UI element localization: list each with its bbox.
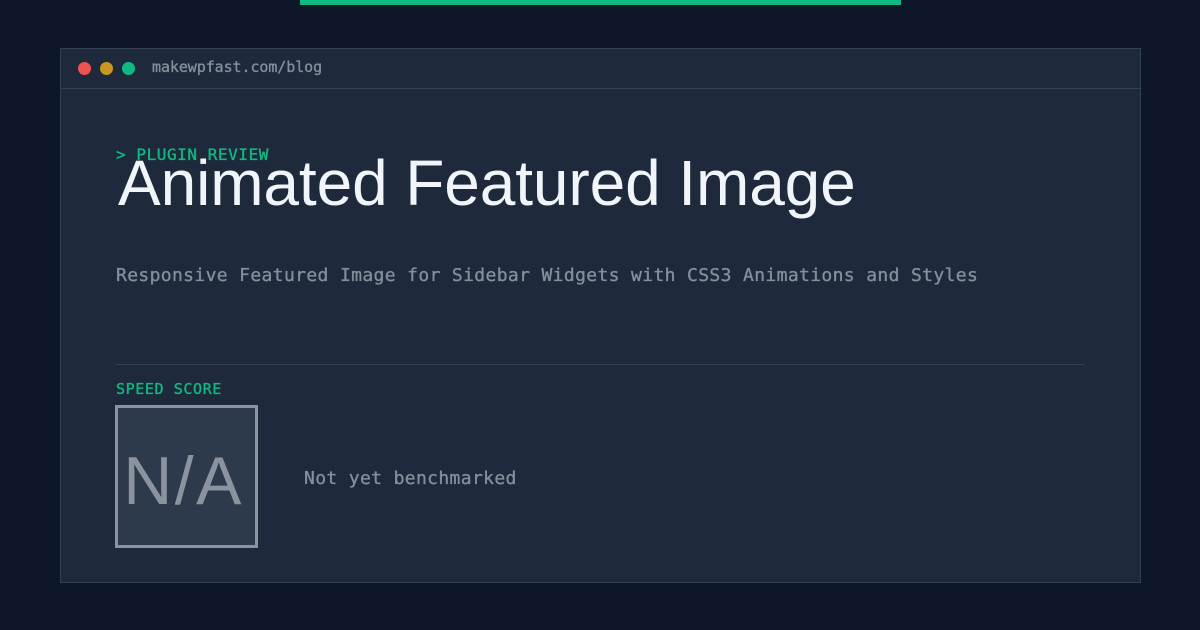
speed score box (115, 405, 258, 548)
divider (116, 364, 1085, 365)
window title bar (61, 49, 1140, 89)
category label: > PLUGIN REVIEW (116, 145, 269, 164)
panel: browser window (60, 48, 1141, 583)
subtitle: Responsive Featured Image for Sidebar Widgets with CSS3 Animations and Styles (116, 265, 978, 286)
speed score label: SPEED SCORE (116, 380, 222, 398)
icon: amber window dot (100, 62, 113, 75)
site URL: makewpfast.com/blog (152, 58, 322, 76)
icon: red window dot (78, 62, 91, 75)
top accent bar (300, 0, 901, 5)
score value: N/A (123, 443, 244, 519)
title: Animated Featured Image (118, 147, 856, 219)
score note: Not yet benchmarked (304, 468, 517, 489)
icon: green window dot (122, 62, 135, 75)
